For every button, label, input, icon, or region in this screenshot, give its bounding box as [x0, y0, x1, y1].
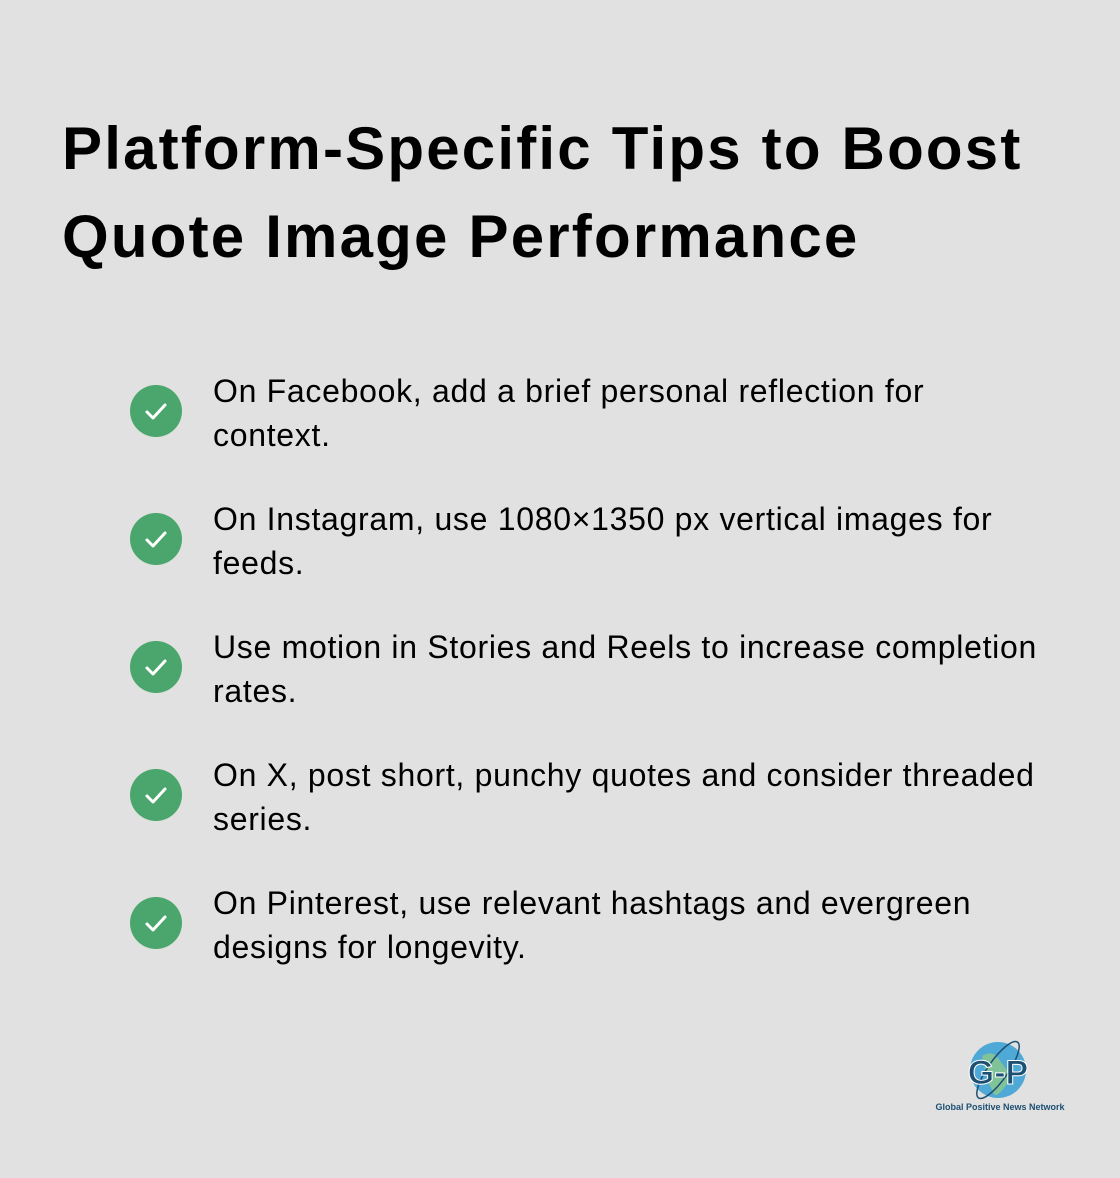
item: Stories [130, 629, 1037, 709]
icon: check [130, 897, 182, 949]
text: feeds. [213, 545, 304, 581]
logo [935, 1040, 1066, 1112]
text [213, 757, 1035, 837]
icon: check [130, 513, 182, 565]
logo: G-P [968, 1054, 1028, 1092]
text: series. [213, 801, 312, 837]
item: Instagram [130, 501, 992, 581]
icon: check [130, 641, 182, 693]
text [213, 885, 971, 965]
text [213, 501, 992, 581]
title: Platform-Specific Tips to Boost [62, 115, 1023, 182]
text: On Instagram, use 1080×1350 px vertical images for [213, 501, 992, 537]
item: X [130, 757, 1035, 837]
text: On Facebook, add a brief personal reflection for [213, 373, 924, 409]
icon: check [130, 769, 182, 821]
title [62, 115, 1023, 270]
title: Quote Image Performance [62, 203, 860, 270]
text: On Pinterest, use relevant hashtags and evergreen [213, 885, 971, 921]
item: Pinterest [130, 885, 971, 965]
text: Use motion in Stories and Reels to increase completion [213, 629, 1037, 665]
item: Facebook [130, 373, 924, 453]
text [213, 373, 924, 453]
text: On X, post short, punchy quotes and consider threaded [213, 757, 1035, 793]
text: rates. [213, 673, 297, 709]
text: designs for longevity. [213, 929, 527, 965]
text: context. [213, 417, 331, 453]
icon: check [130, 385, 182, 437]
logo: Global Positive News Network [935, 1102, 1066, 1112]
text [213, 629, 1037, 709]
